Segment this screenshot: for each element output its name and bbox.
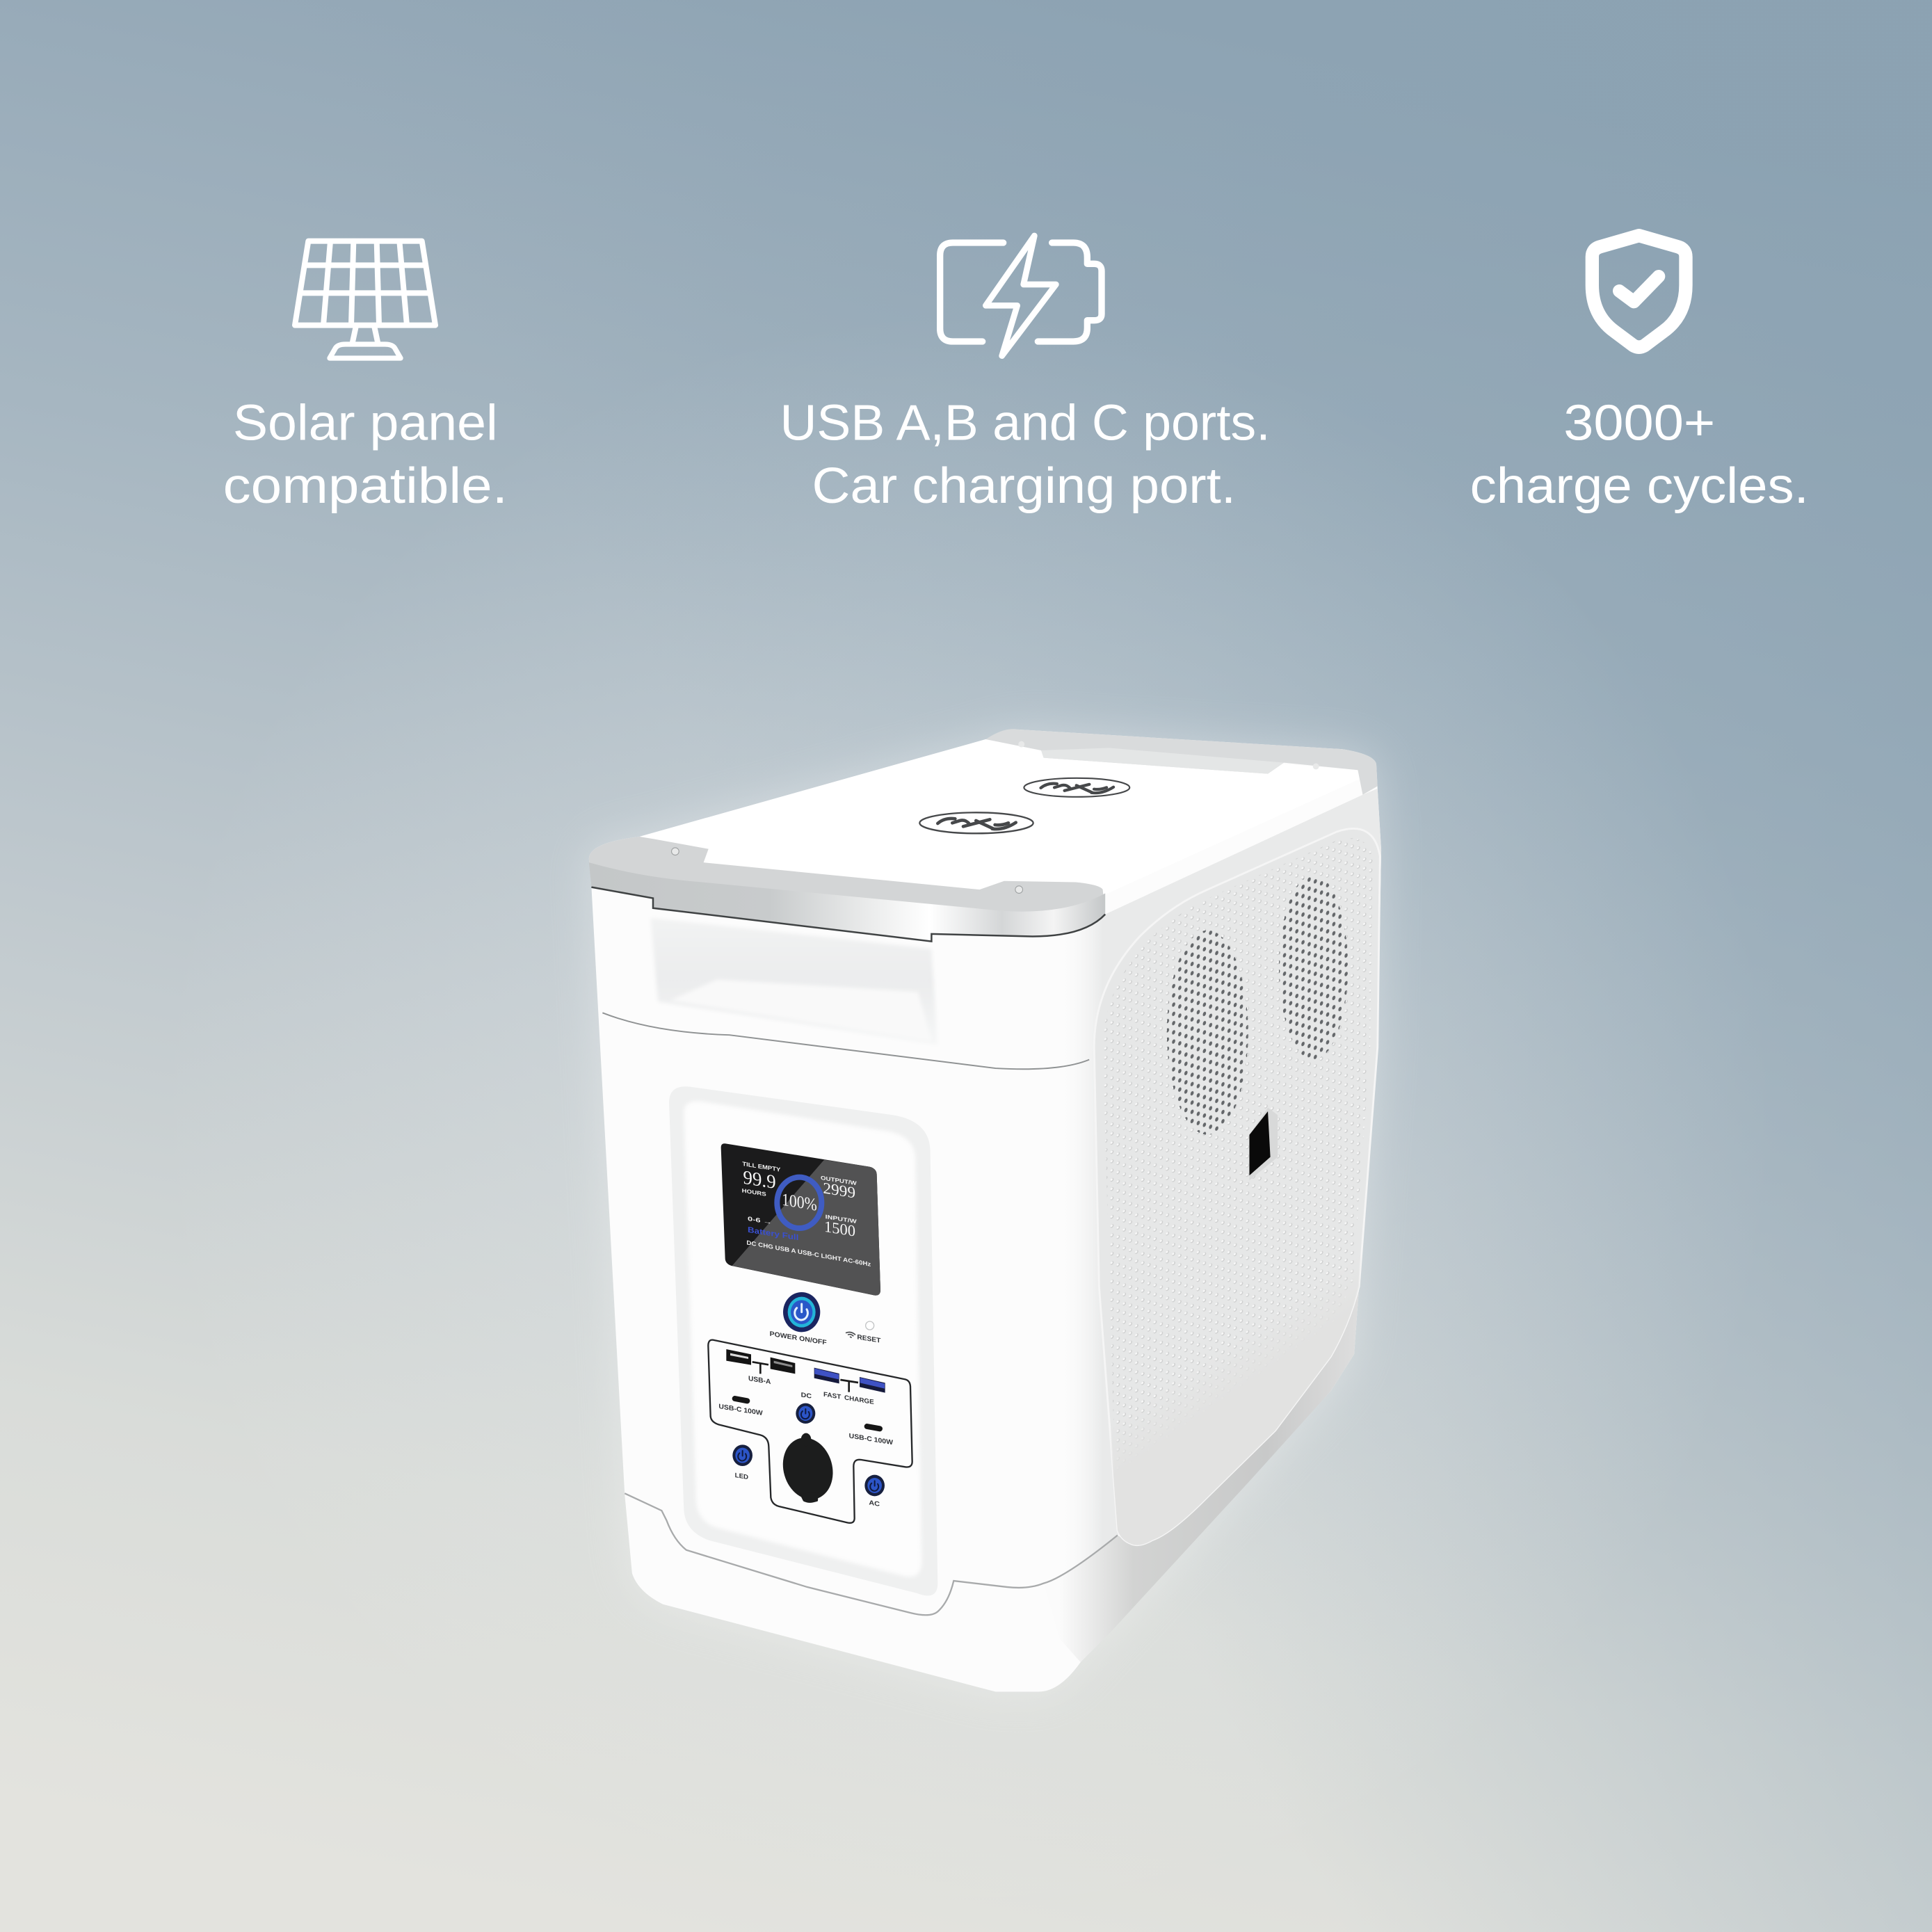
screen readouts: 1500 (824, 1218, 855, 1240)
screen readouts (742, 1160, 871, 1268)
ports outline (708, 1340, 912, 1523)
power and reset labels: RESET (857, 1333, 880, 1345)
USB-A ports (726, 1349, 795, 1386)
text: 3000+ charge cycles: charge cycles. (1470, 458, 1809, 514)
screen readouts: TILL EMPTY (742, 1160, 781, 1173)
wireless charger front (919, 812, 1033, 833)
body seams (602, 1013, 1118, 1615)
device body (589, 730, 1381, 1692)
screen readouts: INPUT/W (826, 1214, 857, 1225)
fast charge ports: CHARGE (844, 1393, 874, 1406)
text: USB and car charging ports: Car charging port. (812, 458, 1236, 514)
screen readouts: 0-6 → (748, 1215, 772, 1226)
text: USB and car charging ports: USB A,B and C ports. (780, 394, 1271, 451)
AC button: AC (869, 1498, 880, 1508)
car charging socket (776, 1432, 840, 1506)
AC button (864, 1475, 885, 1508)
side panel with perforation (1094, 828, 1380, 1545)
DC button (796, 1390, 815, 1424)
display screen (721, 1143, 880, 1296)
USB-C ports: USB-C 100W (849, 1432, 894, 1447)
text: solar panel compatible (223, 394, 508, 514)
fast charge ports: FAST (823, 1390, 842, 1401)
LED button: LED (735, 1471, 748, 1481)
speaker grille right (1279, 875, 1348, 1060)
USB-A ports: USB-A (748, 1375, 771, 1386)
wireless charger rear (1024, 778, 1129, 797)
text: USB and car charging ports (780, 394, 1271, 514)
battery ring (777, 1177, 821, 1228)
icon: battery with lightning bolt (940, 236, 1102, 356)
screen readouts: OUTPUT/W (821, 1175, 857, 1186)
text: solar panel compatible: compatible. (223, 458, 508, 514)
screen readouts: DC CHG USB A USB-C LIGHT AC-60Hz (746, 1239, 871, 1268)
fast charge ports (814, 1368, 885, 1406)
control plate (669, 1086, 937, 1595)
device glow (589, 730, 1381, 1692)
screen readouts: 99.9 (743, 1167, 776, 1193)
speaker grille left (1167, 931, 1248, 1135)
LED button (732, 1444, 752, 1481)
text: 3000+ charge cycles: 3000+ (1563, 394, 1715, 451)
icon: solar panel (295, 241, 435, 358)
power and reset labels (770, 1321, 880, 1347)
power button (770, 1292, 880, 1347)
lid rim (589, 729, 1378, 942)
power and reset labels: POWER ON/OFF (770, 1330, 827, 1347)
side port (1249, 1108, 1278, 1180)
icon: shield with check (1592, 236, 1686, 347)
screen readouts: 2999 (823, 1179, 855, 1202)
power station device (589, 729, 1381, 1692)
text: 3000+ charge cycles (1470, 394, 1809, 514)
ports panel (708, 1340, 912, 1523)
screen readouts: Battery Full (748, 1226, 798, 1242)
USB-C ports: USB-C 100W (718, 1403, 764, 1417)
text: solar panel compatible: Solar panel (233, 394, 498, 451)
feature row (223, 236, 1809, 514)
DC button: DC (801, 1390, 812, 1400)
screen readouts: HOURS (742, 1187, 766, 1198)
screen readouts: 100% (782, 1189, 817, 1215)
USB-C ports (718, 1399, 894, 1447)
carry handle recess (650, 918, 937, 1045)
